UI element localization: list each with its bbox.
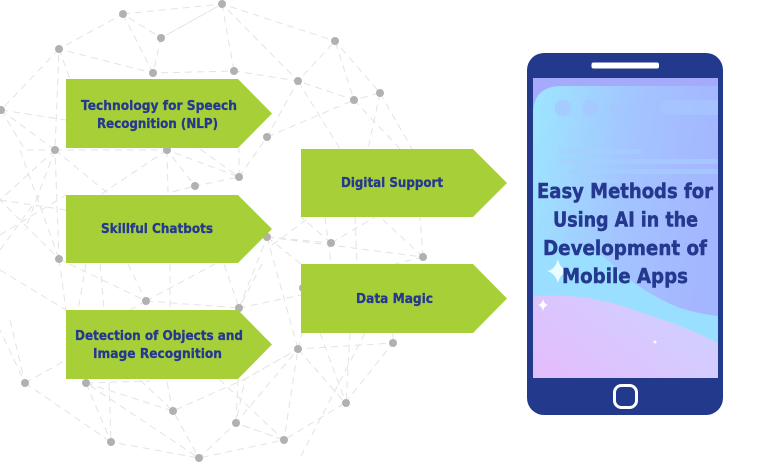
arrow: Detection of Objects and Image Recognition	[66, 310, 272, 379]
arrow: Technology for Speech Recognition	[66, 79, 272, 148]
phone title: Mobile Apps	[562, 264, 688, 288]
arrow: Digital Support: Digital Support	[341, 175, 443, 191]
arrow: Detection of Objects and Image Recognition: Detection of Objects and	[75, 328, 243, 344]
arrow: Technology for Speech Recognition: Technology for Speech	[81, 98, 237, 114]
phone title: Using AI in the	[553, 208, 698, 232]
home button	[614, 386, 636, 408]
phone title	[537, 179, 713, 288]
background network	[0, 0, 427, 462]
arrow: Data Magic	[301, 264, 507, 333]
phone	[527, 53, 723, 415]
arrow: Digital Support	[301, 149, 507, 217]
arrow: Technology for Speech Recognition: Recognition (NLP)	[97, 116, 218, 132]
phone title: Easy Methods for	[537, 179, 713, 203]
arrow: Detection of Objects and Image Recognition: Image Recognition	[93, 346, 222, 362]
speaker	[592, 62, 659, 68]
phone title: Development of	[543, 236, 707, 260]
arrow: Skillful Chatbots	[66, 195, 272, 263]
arrow: Skillful Chatbots: Skillful Chatbots	[101, 221, 213, 237]
phone body	[527, 53, 723, 415]
arrow: Data Magic: Data Magic	[356, 291, 433, 307]
phone screen	[533, 78, 718, 378]
